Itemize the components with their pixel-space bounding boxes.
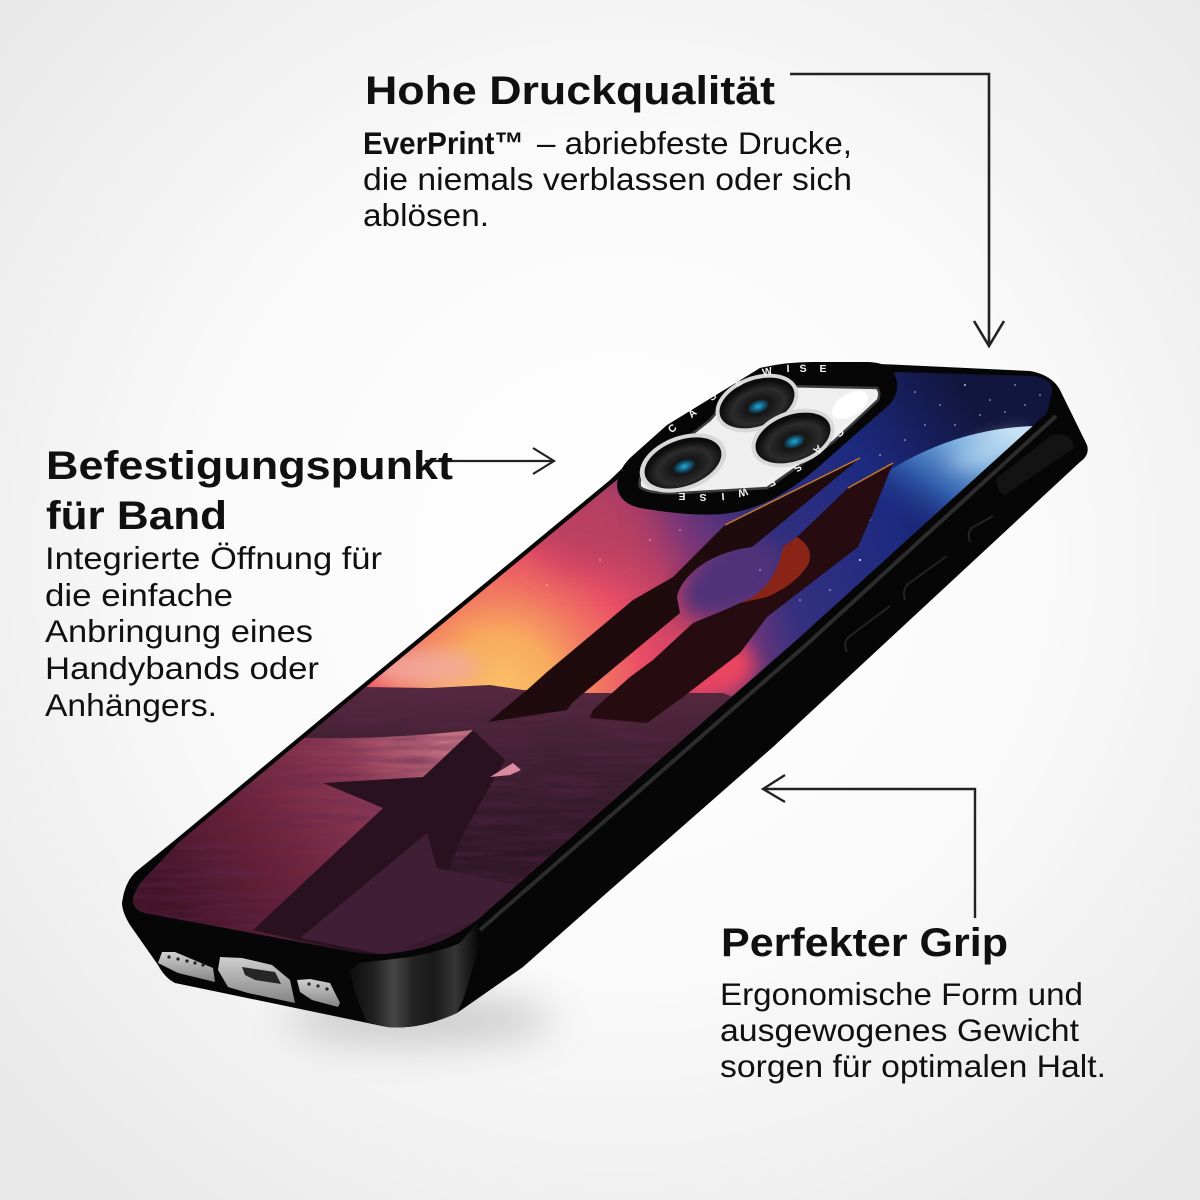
heading: Hohe Druckqualität <box>365 69 775 113</box>
body copy <box>363 125 852 233</box>
side rim highlight <box>480 416 1056 930</box>
bezel lettering top: W <box>761 365 773 379</box>
heading: Befestigungspunkt <box>46 444 453 488</box>
arch gold edges <box>725 458 893 525</box>
bezel lettering bottom: S <box>791 460 804 474</box>
water <box>130 730 473 955</box>
heading: für Band <box>46 494 227 538</box>
side buttons <box>845 516 993 652</box>
heading: Perfekter Grip <box>721 921 1008 965</box>
ground <box>133 685 732 954</box>
bezel lettering bottom: W <box>736 485 749 499</box>
body copy: ablösen. <box>363 197 489 233</box>
bezel lettering bottom: C <box>832 425 846 440</box>
bezel lettering top: A <box>686 406 700 421</box>
bezel lettering bottom: S <box>699 491 707 503</box>
bezel lettering top: E <box>732 376 745 390</box>
flash <box>827 385 873 425</box>
bezel lettering top: S <box>799 363 807 375</box>
bezel lettering top: C <box>666 421 680 436</box>
mauve sky near left edge <box>525 470 655 570</box>
lens 2 <box>743 398 843 478</box>
body copy: ausgewogenes Gewicht <box>720 1012 1079 1048</box>
bezel lettering top: E <box>819 363 827 375</box>
reflection pool <box>300 833 518 955</box>
sky seen through arch <box>677 538 782 624</box>
camera module <box>617 362 897 515</box>
peach horizon glow <box>370 650 480 686</box>
body copy: – abriebfeste Drucke, <box>537 125 852 161</box>
strap opening <box>997 435 1074 495</box>
body copy: Integrierte Öffnung für <box>45 540 382 576</box>
charging port <box>218 957 295 1003</box>
bezel lettering bottom: I <box>721 490 725 502</box>
body copy: Anhängers. <box>45 687 217 723</box>
moon highlight <box>945 428 1030 469</box>
body copy: Handybands oder <box>45 650 319 686</box>
arch red highlight <box>740 537 810 603</box>
bezel lettering top: I <box>786 363 790 375</box>
left speaker <box>158 952 215 982</box>
sky <box>133 372 1052 954</box>
body copy: Ergonomische Form und <box>720 976 1083 1012</box>
stars <box>546 384 1041 601</box>
lens 3 <box>631 422 735 504</box>
speaker holes <box>167 955 329 991</box>
charging opening <box>242 967 281 984</box>
reflection band <box>253 730 505 958</box>
body copy <box>45 540 382 723</box>
body copy: die einfache <box>45 577 233 613</box>
lens 1 <box>707 363 807 443</box>
charging and speaker ports <box>158 952 340 1007</box>
phone case with printed design <box>100 350 1100 1027</box>
text block: Perfekter Grip <box>720 921 1106 1084</box>
lit patch <box>490 763 521 777</box>
bezel lettering bottom <box>678 425 846 503</box>
body copy: Anbringung eines <box>45 613 313 649</box>
body copy: sorgen für optimalen Halt. <box>720 1048 1106 1084</box>
water ripples <box>134 733 469 929</box>
bezel lettering bottom: E <box>766 475 777 489</box>
red glow between pillars <box>655 633 755 697</box>
right speaker <box>297 979 340 1007</box>
arch right pillar <box>590 463 893 723</box>
ground texture <box>366 687 660 881</box>
bezel lettering bottom: A <box>810 442 824 457</box>
text block: Hohe Druckqualität <box>363 69 852 233</box>
bezel lettering top: S <box>706 390 719 404</box>
printed artwork <box>133 372 1052 954</box>
arrow: strap attachment <box>425 448 554 474</box>
phone shadow <box>285 996 555 1044</box>
text block: Befestigungspunkt für Band <box>45 444 453 723</box>
bezel lettering bottom: E <box>678 490 686 502</box>
camera window <box>640 385 879 493</box>
arrow: print quality <box>790 74 1004 346</box>
corner highlight <box>350 923 480 1027</box>
body copy: EverPrint™ <box>363 125 524 161</box>
moon <box>883 426 1032 525</box>
arch left pillar <box>488 458 860 722</box>
arrow: grip <box>763 775 975 918</box>
camera bezel <box>617 362 897 515</box>
bezel lettering top <box>666 363 827 436</box>
case body <box>122 364 1088 1027</box>
body copy <box>720 976 1106 1084</box>
heading <box>46 444 453 538</box>
body copy: die niemals verblassen oder sich <box>363 161 852 197</box>
